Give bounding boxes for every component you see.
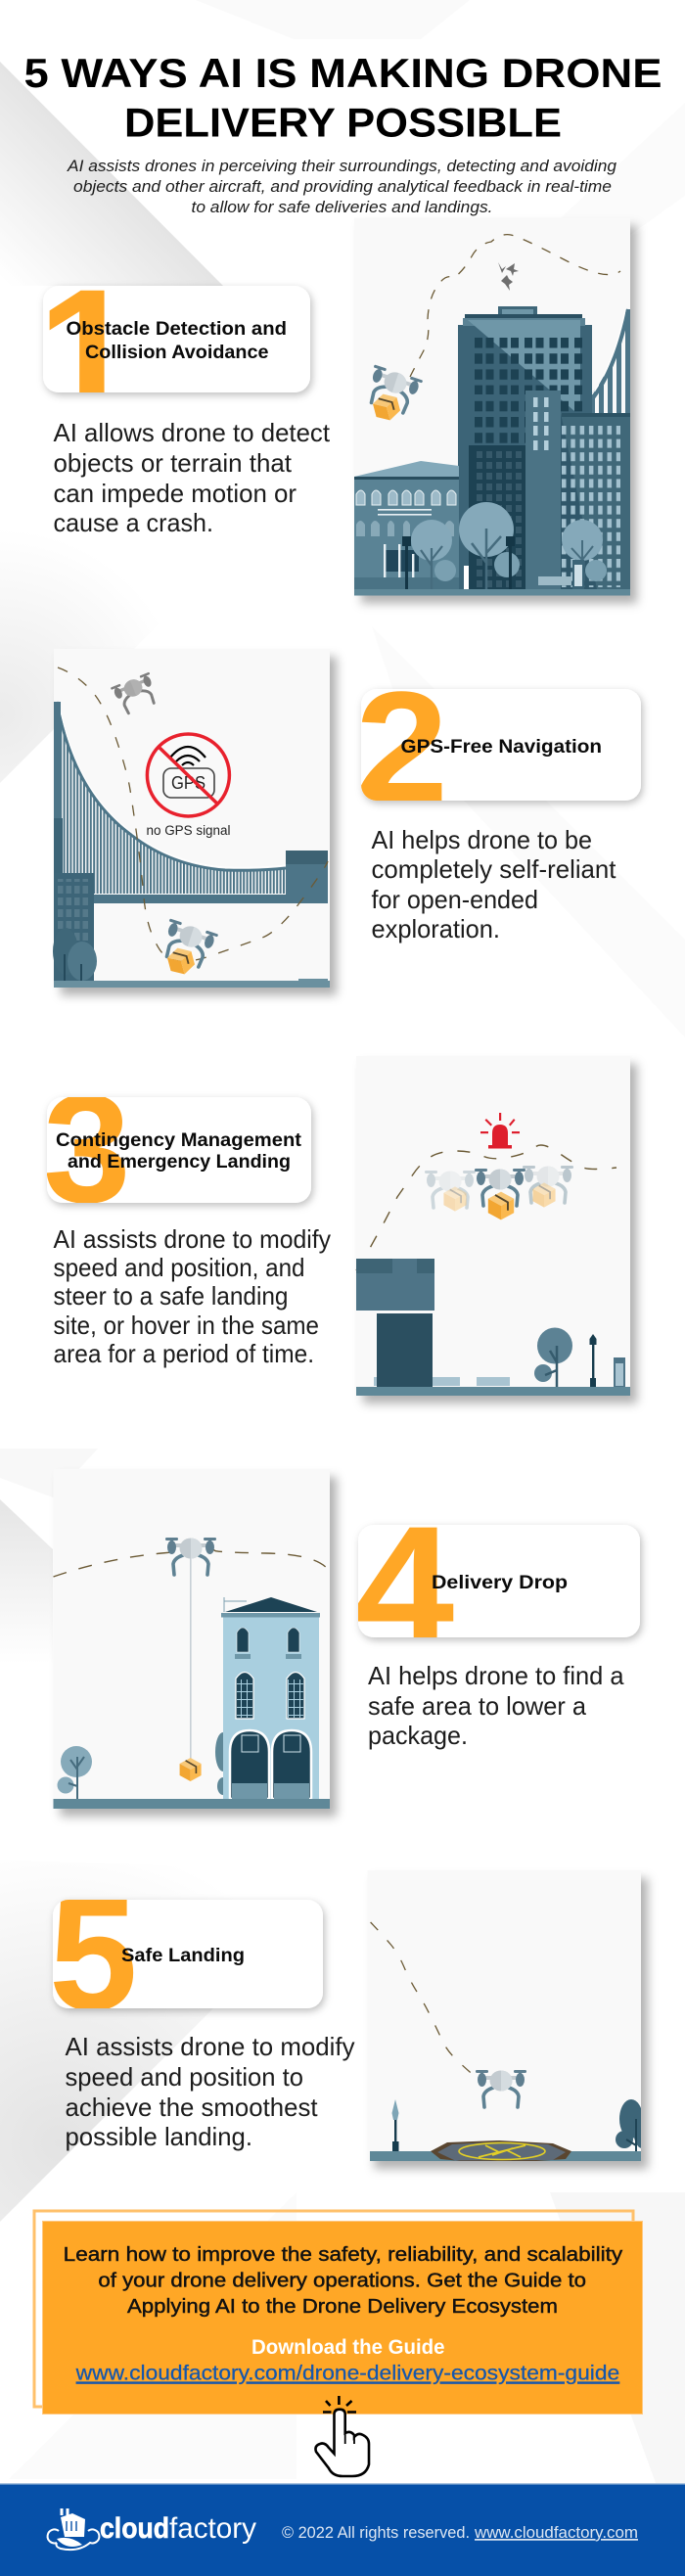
heading text: and Emergency Landing — [68, 1152, 291, 1173]
icon: faded drone left — [425, 1171, 476, 1208]
intro text: AI assists drones in perceiving their surroundings, detecting and avoiding — [67, 158, 617, 175]
icon: faded package left — [443, 1186, 467, 1212]
building — [356, 1259, 434, 1388]
intro text — [67, 158, 617, 216]
number 2: 2 — [355, 660, 448, 835]
intro text: objects and other aircraft, and providing analytical feedback in real-time — [73, 178, 612, 196]
text: step 2 description — [372, 825, 616, 943]
bush behind building — [215, 1732, 231, 1795]
icon: package — [371, 391, 402, 424]
title — [23, 50, 662, 145]
tree — [534, 1327, 572, 1388]
flight path — [58, 667, 328, 961]
heading text — [56, 1130, 302, 1173]
icon: no GPS sign: GPS — [171, 773, 206, 793]
text: step 5 description: possible landing. — [65, 2122, 252, 2151]
ground — [53, 1799, 330, 1809]
street lamp — [391, 2099, 399, 2153]
logo wordmark: factory — [169, 2512, 256, 2545]
main tower — [458, 306, 592, 589]
trees — [57, 1746, 92, 1799]
text: step 1 description: cause a crash. — [53, 508, 213, 537]
text: step 1 description — [53, 418, 331, 537]
intro text: to allow for safe deliveries and landings. — [192, 199, 493, 216]
card: step 1 heading — [41, 284, 317, 399]
text: step 4 description — [368, 1661, 624, 1750]
heading text: Contingency Management — [56, 1130, 302, 1151]
icon: faded drone right — [523, 1166, 573, 1203]
text: step 3 description — [53, 1224, 331, 1368]
icon: suspension bridge — [54, 702, 328, 903]
icon: red alarm — [480, 1113, 520, 1149]
title: 5 WAYS AI IS MAKING DRONE — [23, 50, 662, 96]
icon: bridge — [592, 309, 630, 413]
text: step 1 description: AI allows drone to detect — [53, 418, 331, 447]
title: DELIVERY POSSIBLE — [124, 100, 562, 145]
icon: package — [165, 944, 197, 978]
logo wordmark: cloud — [100, 2512, 169, 2545]
footer — [0, 2483, 685, 2576]
building — [221, 1597, 320, 1799]
text: step 1 description: objects or terrain that — [53, 448, 293, 478]
benches — [374, 1377, 510, 1386]
flight path — [371, 1922, 477, 2078]
icon: clicking hand — [315, 2396, 369, 2476]
icon: drone with package — [159, 919, 218, 970]
call to action panel — [34, 2211, 642, 2414]
text: step 3 description: speed and position, and — [53, 1253, 305, 1282]
copyright text — [282, 2523, 638, 2542]
heading text: Delivery Drop — [432, 1573, 568, 1593]
heading text: Obstacle Detection and — [67, 319, 287, 340]
icon: center drone — [475, 1169, 525, 1206]
panel: safe landing illustration — [368, 1870, 651, 2161]
icon: faded package right — [532, 1182, 556, 1208]
number 4: 4 — [355, 1490, 454, 1681]
caption: no GPS signal: no GPS signal — [147, 823, 231, 838]
icon: gray drone — [111, 672, 160, 716]
call to action text: Learn how to improve the safety, reliability, and scalability — [64, 2243, 623, 2266]
text: step 2 description: exploration. — [372, 914, 500, 943]
heading text: GPS-Free Navigation — [401, 737, 602, 758]
call to action text: Applying AI to the Drone Delivery Ecosystem — [127, 2295, 558, 2318]
panel: GPS-free navigation illustration — [53, 649, 330, 988]
logo mark — [48, 2508, 99, 2550]
ground — [354, 589, 630, 595]
card: step 3 heading — [45, 1096, 317, 1210]
front tower — [525, 391, 561, 589]
text: step 4 description: AI helps drone to find a — [368, 1661, 624, 1690]
number 3: 3 — [43, 1062, 131, 1235]
tether line — [190, 1556, 192, 1760]
call to action text — [64, 2243, 623, 2318]
icon: no GPS sign — [147, 734, 229, 816]
flight path — [356, 1145, 616, 1270]
ground — [54, 979, 330, 988]
guide link: www.cloudfactory.com/drone-delivery-ecosystem-guide — [75, 2361, 619, 2384]
icon: birds — [498, 262, 519, 291]
text: step 4 description: package. — [368, 1721, 468, 1750]
text: step 2 description: AI helps drone to be — [372, 825, 592, 854]
text: step 3 description: steer to a safe landing — [53, 1281, 288, 1311]
street lamp — [589, 1334, 597, 1388]
card: step 5 heading — [51, 1899, 329, 2016]
text: step 5 description — [65, 2032, 354, 2151]
flight path — [53, 1549, 330, 1577]
panel: obstacle detection illustration — [354, 217, 630, 595]
trees and lamps — [402, 502, 607, 589]
heading text: Collision Avoidance — [85, 343, 268, 363]
icon: center package — [488, 1192, 514, 1219]
heading text: Safe Landing — [121, 1946, 245, 1966]
left building — [354, 461, 469, 589]
text: step 5 description: speed and position to — [65, 2062, 303, 2092]
card: step 4 heading — [356, 1523, 646, 1644]
copyright text: © 2022 All rights reserved. — [282, 2523, 470, 2542]
phone box — [614, 1357, 625, 1388]
building and trees — [53, 873, 97, 981]
icon: drone — [476, 2070, 526, 2107]
icon: package — [180, 1758, 202, 1781]
heading text — [67, 319, 287, 363]
text: step 2 description: completely self-reliant — [372, 854, 616, 884]
text: step 5 description: achieve the smoothest — [65, 2093, 318, 2122]
panel: delivery drop illustration — [53, 1469, 330, 1809]
card: step 2 heading — [358, 687, 648, 808]
icon: helipad — [431, 2140, 571, 2161]
copyright text: www.cloudfactory.com — [474, 2523, 638, 2542]
call to action text: of your drone delivery operations. Get the Guide to — [98, 2269, 586, 2292]
number 5: 5 — [49, 1864, 138, 2044]
panel: contingency management illustration — [356, 1056, 630, 1396]
number 1: 1 — [37, 253, 138, 454]
text: step 5 description: AI assists drone to modify — [65, 2032, 354, 2061]
text: step 3 description: site, or hover in the same — [53, 1311, 319, 1340]
trees — [616, 2099, 641, 2151]
logo wordmark — [100, 2512, 256, 2545]
text: step 4 description: safe area to lower a — [368, 1691, 587, 1721]
right building — [561, 413, 630, 589]
flight path — [410, 235, 620, 377]
icon: drone with package — [363, 365, 423, 416]
ground — [370, 2151, 641, 2161]
text: step 1 description: can impede motion or — [53, 479, 297, 508]
text: step 3 description: AI assists drone to modify — [53, 1224, 331, 1254]
download heading: Download the Guide — [251, 2336, 444, 2359]
text: step 2 description: for open-ended — [372, 885, 538, 914]
text: step 3 description: area for a period of time. — [53, 1339, 314, 1368]
ground — [356, 1387, 630, 1396]
icon: drone — [165, 1538, 216, 1575]
